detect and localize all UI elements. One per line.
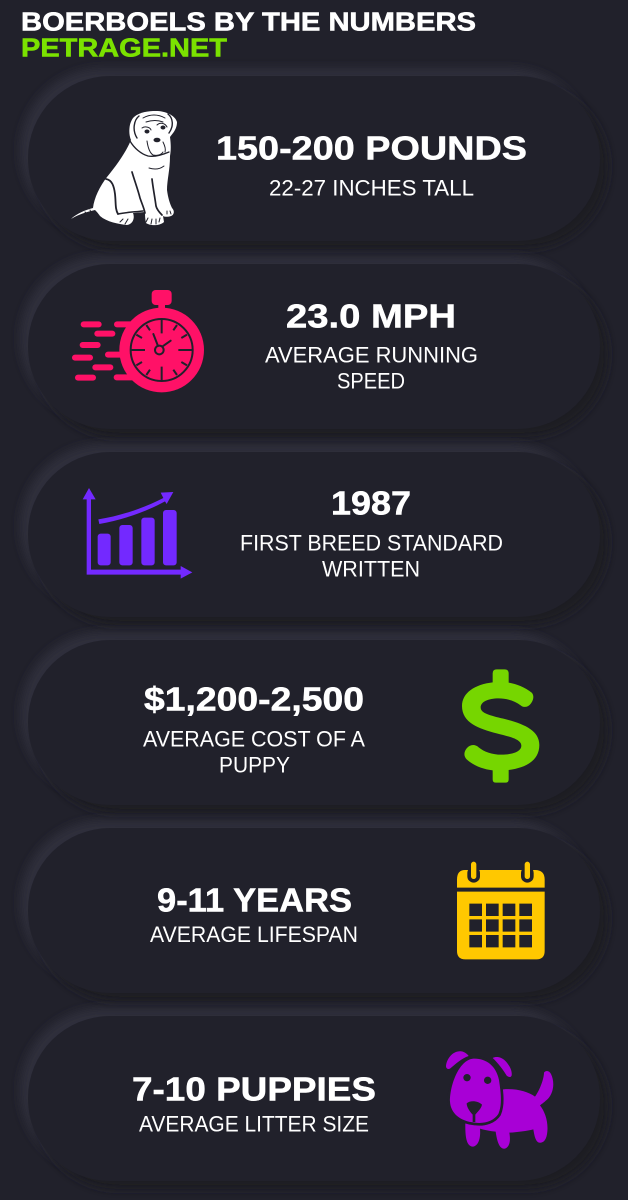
weight figure: 150-200 POUNDS	[216, 130, 527, 166]
speed label: AVERAGE RUNNING	[265, 342, 478, 368]
panel: puppy cost	[143, 669, 539, 783]
icon: dollar sign	[462, 669, 539, 783]
panel: breed standard: WRITTEN	[322, 556, 420, 582]
panel: breed standard	[83, 484, 503, 582]
panel: running speed: SPEED	[337, 368, 405, 394]
source name: PETRAGE.NET	[21, 32, 227, 62]
litter label: AVERAGE LITTER SIZE	[139, 1112, 369, 1136]
icon: growth chart	[83, 488, 192, 579]
panel: weight and height	[71, 111, 527, 225]
title	[21, 6, 476, 62]
standard label: FIRST BREED STANDARD	[240, 530, 503, 556]
year figure: 1987	[331, 484, 411, 522]
icon: calendar	[457, 862, 545, 959]
panel: litter size	[132, 1051, 553, 1149]
cost figure: $1,200-2,500	[144, 680, 364, 718]
height label: 22-27 INCHES TALL	[269, 176, 474, 200]
lifespan label: AVERAGE LIFESPAN	[150, 922, 358, 947]
lifespan figure: 9-11 YEARS	[157, 882, 352, 918]
cost label: AVERAGE COST OF A	[143, 726, 365, 752]
panel: running speed	[72, 290, 478, 394]
icon: puppy	[446, 1051, 553, 1149]
litter figure: 7-10 PUPPIES	[132, 1070, 376, 1108]
panel: puppy cost: PUPPY	[219, 752, 290, 778]
title: BOERBOELS BY THE NUMBERS	[21, 6, 476, 36]
icon: sitting dog	[71, 111, 177, 225]
speed figure: 23.0 MPH	[286, 298, 456, 334]
panel: lifespan	[150, 862, 545, 959]
icon: stopwatch	[72, 290, 204, 392]
